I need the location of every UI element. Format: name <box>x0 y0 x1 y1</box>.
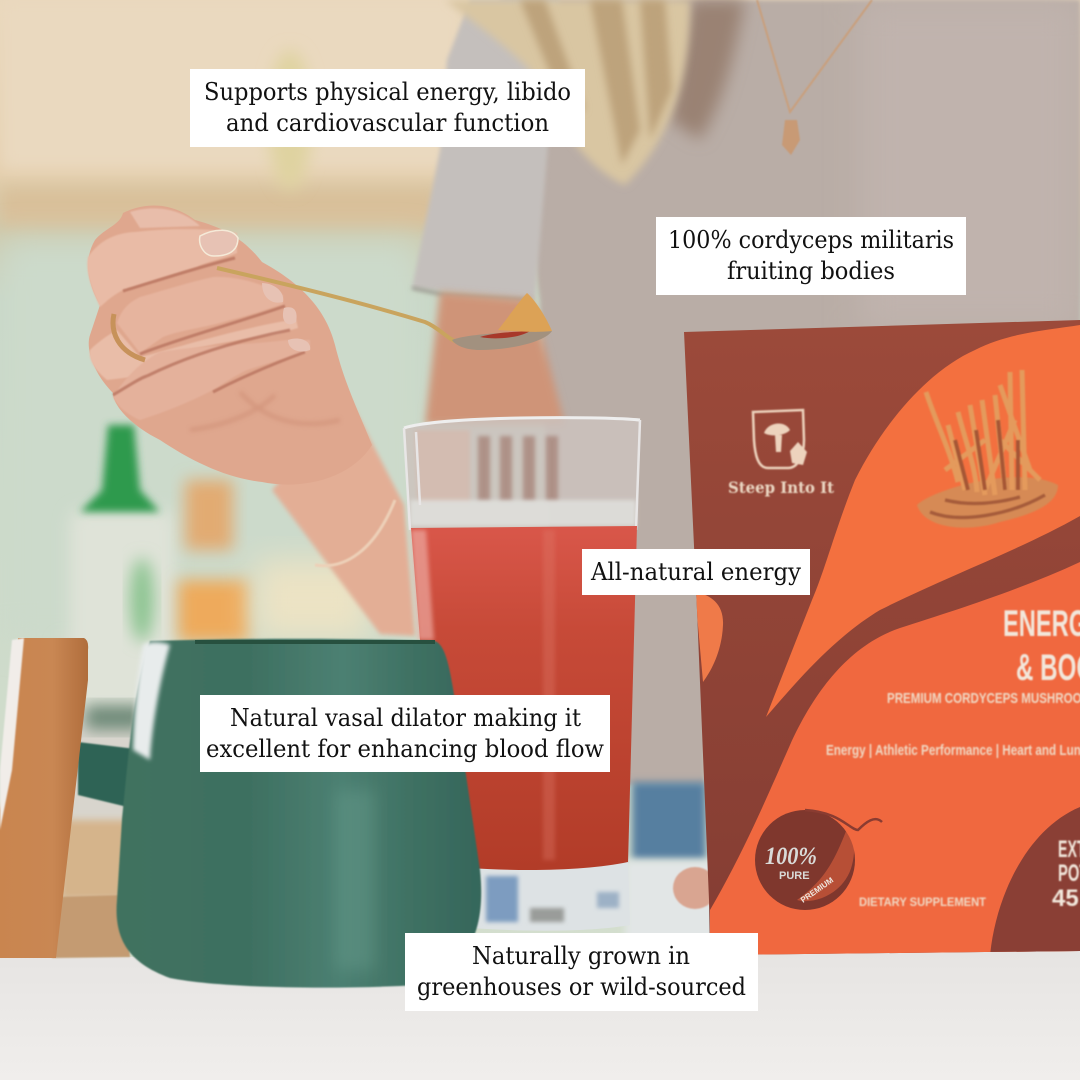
callout: all-natural energy: All-natural energy <box>590 558 801 586</box>
middle finger <box>117 277 283 353</box>
brown corner panel <box>990 807 1080 956</box>
glass of red cordyceps drink <box>404 418 640 931</box>
callout: vasal dilator: Natural vasal dilator making it <box>230 704 581 732</box>
glass base <box>470 862 630 931</box>
callout: vasal dilator: excellent for enhancing blood flow <box>206 735 604 763</box>
100% pure badge: PURE <box>779 870 810 882</box>
counter top <box>0 950 1080 1080</box>
callout: physical energy <box>190 69 585 147</box>
jeans and back counter <box>625 782 715 955</box>
callout: cordyceps militaris: 100% cordyceps militaris <box>668 226 954 254</box>
hand behind pouch <box>673 867 717 909</box>
pouch title: DIETARY SUPPLEMENT <box>859 895 987 909</box>
mug body <box>117 639 481 988</box>
gold spoon with powder <box>217 268 552 350</box>
callout: cordyceps militaris: fruiting bodies <box>727 257 895 285</box>
pouch title <box>826 603 1080 912</box>
gold ring <box>113 314 145 360</box>
callout: naturally grown: Naturally grown in <box>472 942 690 970</box>
brand logo: steep into it: Steep Into It <box>728 478 835 497</box>
callout: cordyceps militaris <box>656 217 966 295</box>
callout: all-natural energy <box>582 549 810 595</box>
ring finger <box>90 319 298 380</box>
callout: naturally grown: greenhouses or wild-sourced <box>417 973 746 1001</box>
100% pure badge <box>755 810 882 910</box>
index finger <box>87 229 237 307</box>
callout: vasal dilator <box>200 695 610 772</box>
necklace <box>757 0 872 155</box>
woman's shirt <box>412 0 1080 785</box>
coaster <box>52 895 130 958</box>
small orange side shape <box>695 592 723 682</box>
hand holding spoon <box>87 206 415 636</box>
100% pure badge: 100% <box>765 843 817 870</box>
thumb and palm <box>88 206 372 485</box>
callout: naturally grown <box>405 933 758 1011</box>
little finger <box>113 340 310 420</box>
woman's upper arm <box>425 292 565 425</box>
red drink <box>411 526 637 871</box>
cordyceps illustration <box>917 370 1058 528</box>
powder scoop <box>498 293 552 332</box>
100% pure badge: PREMIUM <box>799 875 835 905</box>
finger creases <box>113 258 305 395</box>
mug handle arm <box>78 742 160 815</box>
orange lower shape <box>710 562 1080 956</box>
finger nails <box>200 230 310 352</box>
callout: physical energy: Supports physical energy, libido <box>204 78 571 106</box>
callout: physical energy: and cardiovascular function <box>226 109 549 137</box>
product pouch <box>684 320 1080 956</box>
wooden handled green mug <box>0 638 481 988</box>
brand logo: steep into it <box>728 410 835 497</box>
woman's hair <box>445 0 745 185</box>
wood handle <box>0 638 88 958</box>
forearm <box>272 400 415 636</box>
blurred bottles in background <box>70 425 370 730</box>
orange upper shape <box>766 325 1080 717</box>
